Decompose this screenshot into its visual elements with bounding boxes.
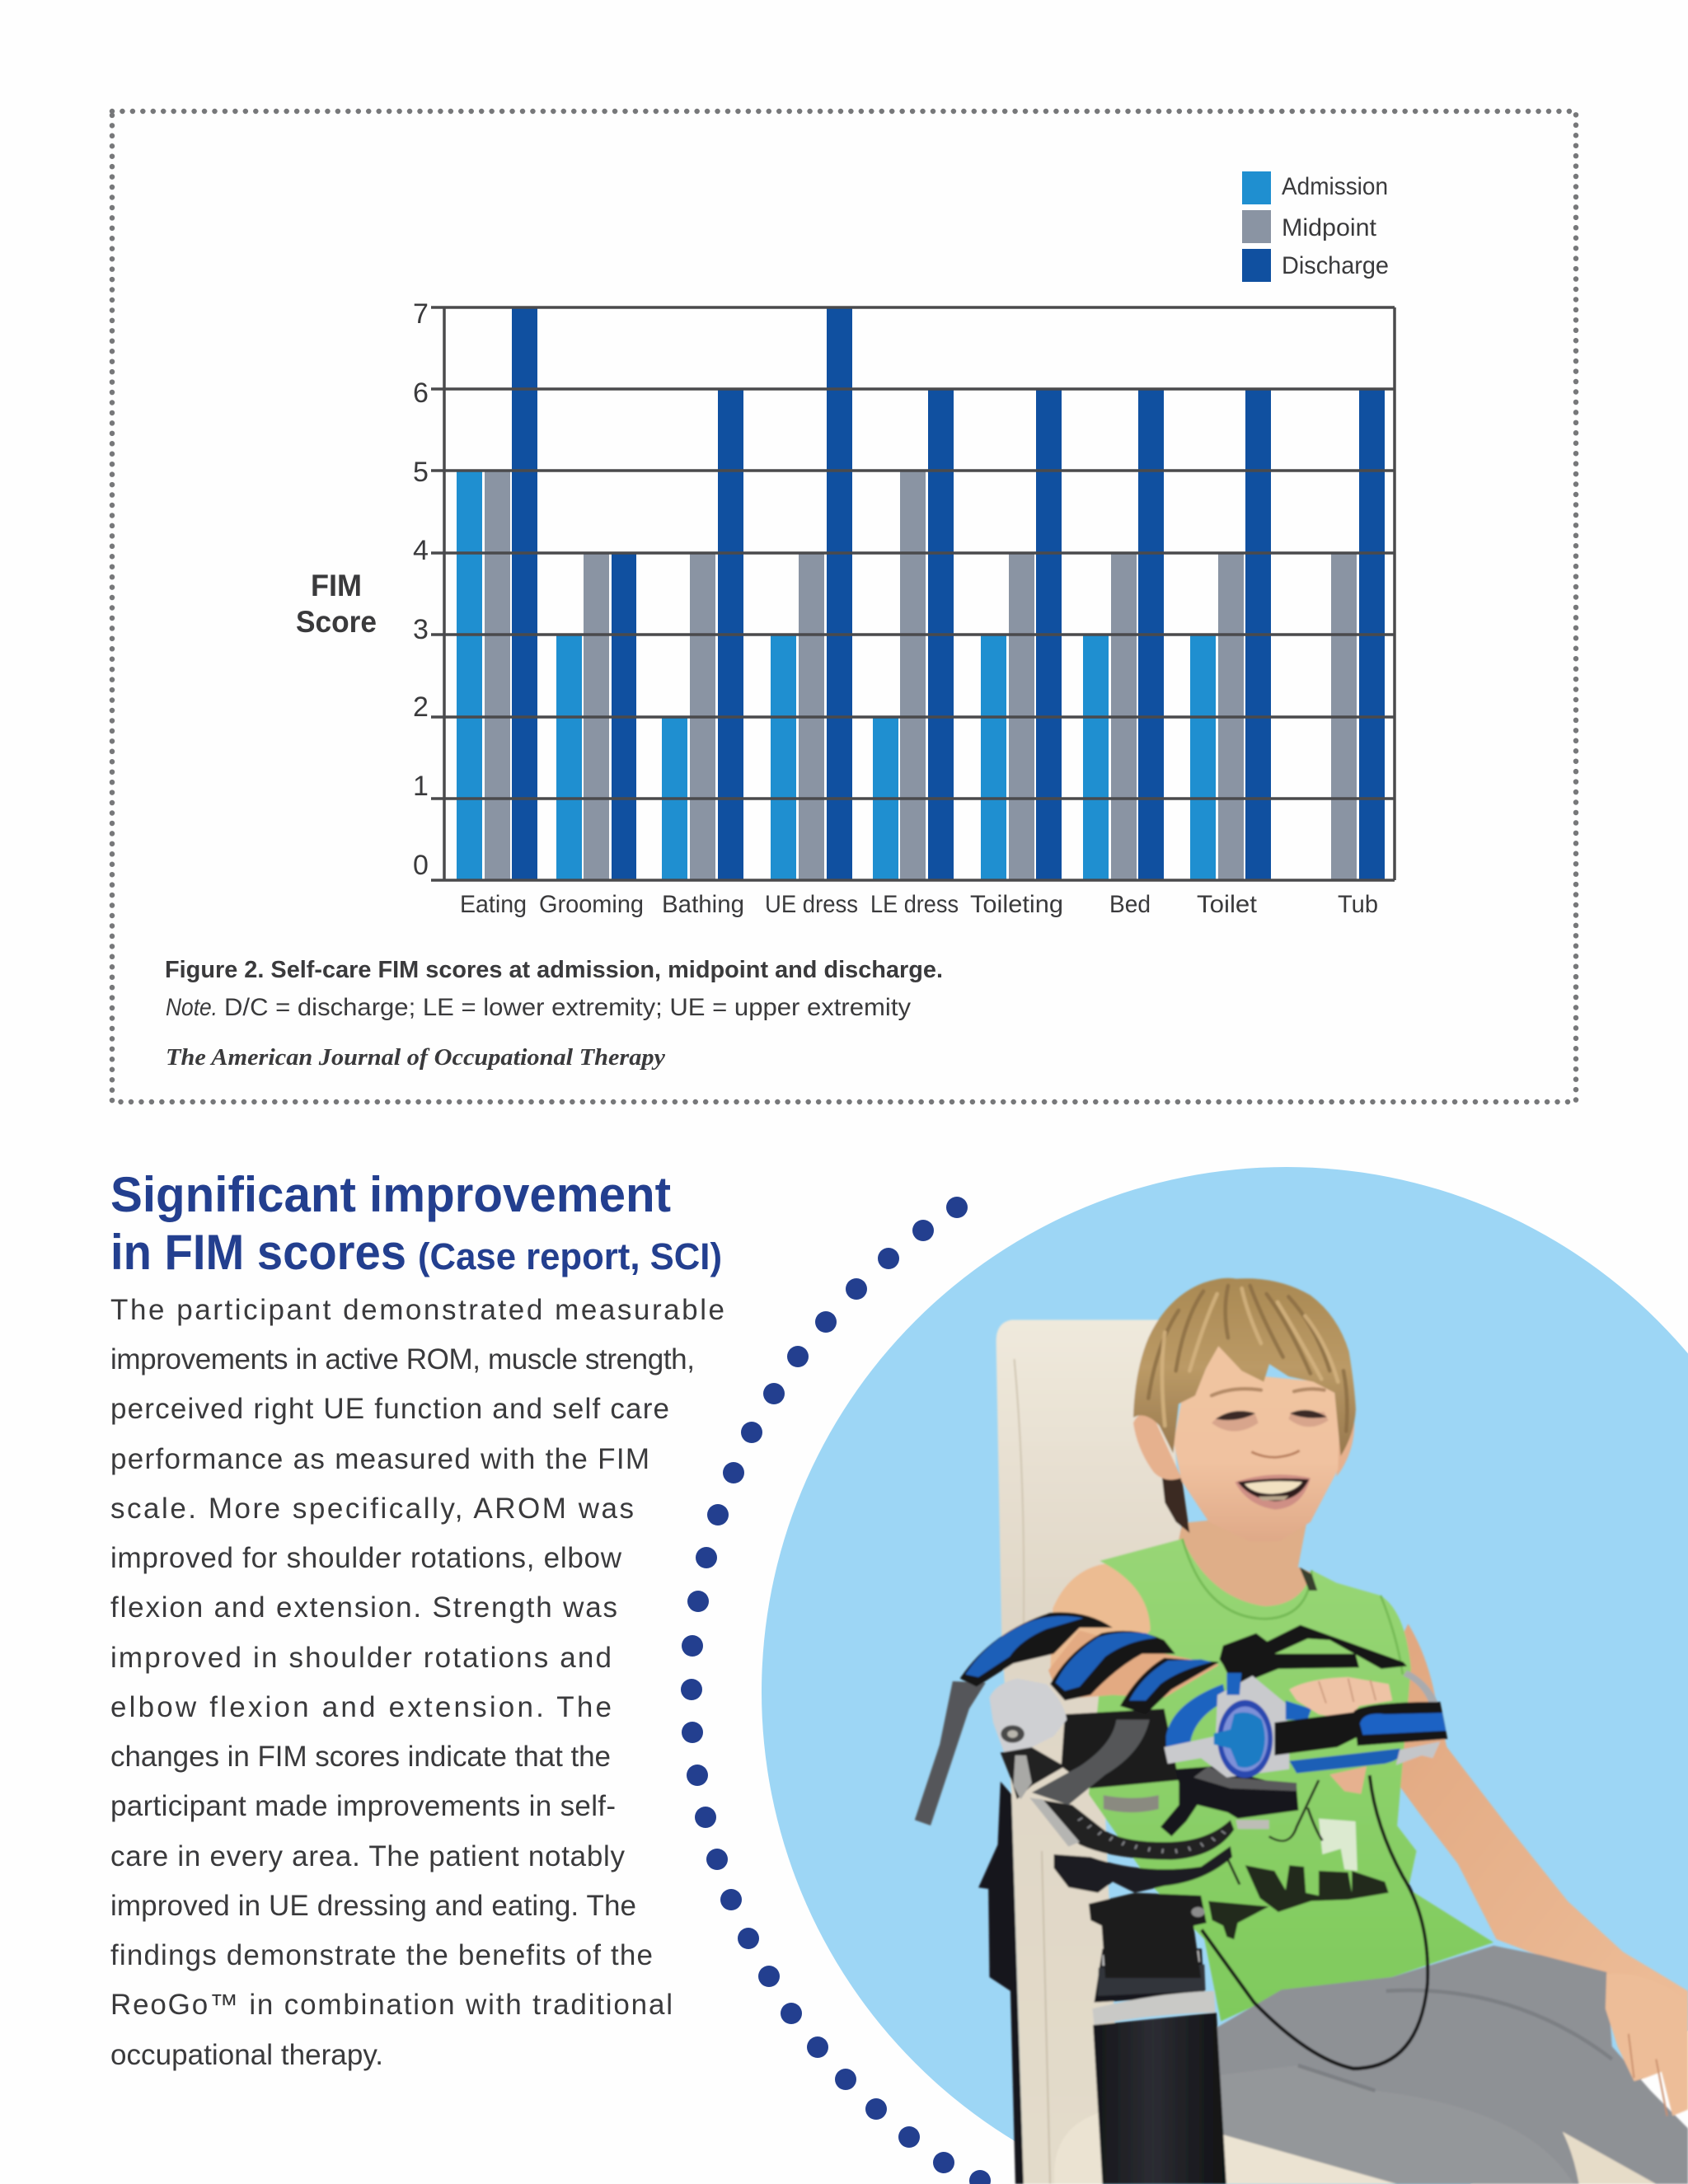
hair — [1133, 1278, 1356, 1456]
neck — [1177, 1511, 1315, 1611]
left shoulder — [1050, 1563, 1177, 1706]
eyes — [1212, 1410, 1329, 1432]
hand on thigh — [1606, 1974, 1688, 2116]
eyebrows — [1212, 1389, 1325, 1395]
body text: scale. More specifically, AROM was — [110, 1493, 634, 1525]
forearm skin — [1048, 1630, 1219, 1698]
body text: improvements in active ROM, muscle strength, — [110, 1343, 695, 1376]
grey cylinder — [1104, 1795, 1159, 1812]
body text: participant made improvements in self- — [110, 1790, 616, 1822]
forearm pad 1 — [960, 1612, 1113, 1687]
chair — [996, 1320, 1397, 2184]
heading: (Case report, SCI) — [418, 1235, 722, 1277]
chair and body layer — [978, 1320, 1688, 2184]
bars: Bed — [1083, 389, 1164, 880]
heading: in FIM scores — [110, 1225, 406, 1280]
shirt collar detail — [1182, 1539, 1403, 1675]
top black straps — [1219, 1625, 1407, 1687]
body text: elbow flexion and extension. The — [110, 1691, 612, 1723]
body text: ReoGo™ in combination with traditional — [110, 1989, 673, 2021]
legend: Discharge — [1282, 252, 1389, 279]
y axis title — [296, 569, 377, 639]
green tank top — [1089, 1539, 1493, 2022]
curved blue hand support — [1166, 1684, 1226, 1747]
bars: Toilet — [1190, 389, 1271, 880]
fist — [1289, 1677, 1392, 1794]
far part of seat — [1563, 2131, 1656, 2184]
body text: occupational therapy. — [110, 2039, 383, 2071]
body text: findings demonstrate the benefits of the — [110, 1939, 653, 1971]
x axis labels: Toilet — [1197, 891, 1258, 918]
bars: Bathing — [662, 389, 743, 880]
heading — [110, 1167, 722, 1280]
black frame — [1061, 1708, 1179, 1788]
x axis labels: Toileting — [970, 891, 1063, 918]
x axis labels — [460, 891, 1378, 918]
bars: LE dress — [873, 389, 954, 880]
y axis labels: 4 — [413, 535, 429, 566]
body text: improved for shoulder rotations, elbow — [110, 1542, 622, 1574]
body text: performance as measured with the FIM — [110, 1443, 649, 1475]
journal source: The American Journal of Occupational Therapy — [166, 1045, 666, 1071]
bars: Grooming — [556, 553, 636, 880]
body text: flexion and extension. Strength was — [110, 1591, 617, 1624]
grey hanging strap — [915, 1681, 986, 1825]
silver wrist frame — [1164, 1675, 1289, 1778]
right arm — [1375, 1624, 1688, 2015]
legend: Midpoint — [1282, 214, 1377, 241]
nose — [1251, 1451, 1300, 1457]
goniometer arc — [1030, 1798, 1234, 1860]
x axis labels: UE dress — [765, 891, 858, 918]
figure caption: Figure 2. Self-care FIM scores at admission, midpoint and discharge. — [165, 957, 943, 983]
dotted panel border — [112, 111, 1576, 1102]
note: Note. — [166, 994, 218, 1021]
y axis labels: 1 — [413, 771, 429, 802]
legend: Admission — [1282, 173, 1388, 200]
body text — [110, 1294, 724, 2071]
inner collar shadow — [1300, 1568, 1317, 1591]
clamp — [1089, 1893, 1207, 1978]
forearm pad 2 — [1050, 1631, 1175, 1700]
body text: improved in UE dressing and eating. The — [110, 1890, 636, 1922]
body text: perceived right UE function and self care — [110, 1393, 669, 1425]
ears — [1133, 1414, 1354, 1480]
black cable — [1202, 1775, 1428, 2069]
device post — [1093, 1949, 1226, 2184]
y axis labels: 6 — [413, 377, 429, 409]
x axis labels: LE dress — [870, 891, 959, 918]
black hand strap — [1274, 1712, 1359, 1755]
shirt print — [1208, 1780, 1389, 1939]
bars: Toileting — [981, 389, 1062, 880]
note: D/C = discharge; LE = lower extremity; UE = upper extremity — [224, 994, 911, 1021]
body text: The participant demonstrated measurable — [110, 1294, 724, 1326]
y axis labels: 5 — [413, 457, 429, 488]
hand grip blue — [1286, 1700, 1311, 1720]
x axis labels: Grooming — [539, 891, 644, 918]
x axis labels: Tub — [1338, 891, 1378, 918]
y axis labels: 3 — [413, 614, 429, 645]
y axis labels — [413, 298, 429, 881]
lower blue bar — [1289, 1749, 1401, 1774]
panel: figure 2 chart — [112, 111, 1576, 1102]
dotted arc — [681, 1197, 991, 2184]
body text: care in every area. The patient notably — [110, 1840, 625, 1872]
body text: changes in FIM scores indicate that the — [110, 1741, 611, 1773]
blue hand strap — [1353, 1702, 1447, 1746]
strap two — [1032, 1720, 1150, 1805]
lower arc mount — [1054, 1846, 1232, 1893]
y axis labels: 0 — [413, 850, 429, 881]
x axis labels: Eating — [460, 891, 527, 918]
x axis labels: Bed — [1109, 891, 1151, 918]
body text: improved in shoulder rotations and — [110, 1642, 612, 1674]
forearm pad 3 — [1120, 1658, 1219, 1714]
face — [1174, 1343, 1339, 1542]
gray sweatpants — [1217, 1946, 1688, 2184]
y axis title: FIM — [311, 569, 362, 602]
x axis labels: Bathing — [662, 891, 744, 918]
y axis title: Score — [296, 605, 377, 639]
bars: Eating — [457, 307, 537, 880]
plate under hand — [1160, 1766, 1298, 1836]
smile — [1235, 1474, 1311, 1510]
bars: UE dress — [771, 307, 852, 880]
silver ring — [1404, 1671, 1438, 1704]
y axis labels: 7 — [413, 298, 429, 330]
back hair — [1162, 1475, 1189, 1533]
light blue circle — [762, 1167, 1688, 2184]
y axis labels: 2 — [413, 691, 429, 723]
bars: Tub — [1331, 389, 1385, 880]
illustration: boy in chair with ReoGo device — [915, 1278, 1688, 2184]
hair strands — [1148, 1286, 1347, 1432]
black bag strap behind chair — [978, 1782, 1024, 2184]
ReoGo arm brace — [915, 1612, 1447, 1978]
wrist dial — [1214, 1700, 1273, 1778]
silver elbow joint — [989, 1679, 1067, 1799]
heading: Significant improvement — [110, 1167, 671, 1222]
legend — [1242, 171, 1389, 282]
boy's head — [1133, 1278, 1356, 1591]
